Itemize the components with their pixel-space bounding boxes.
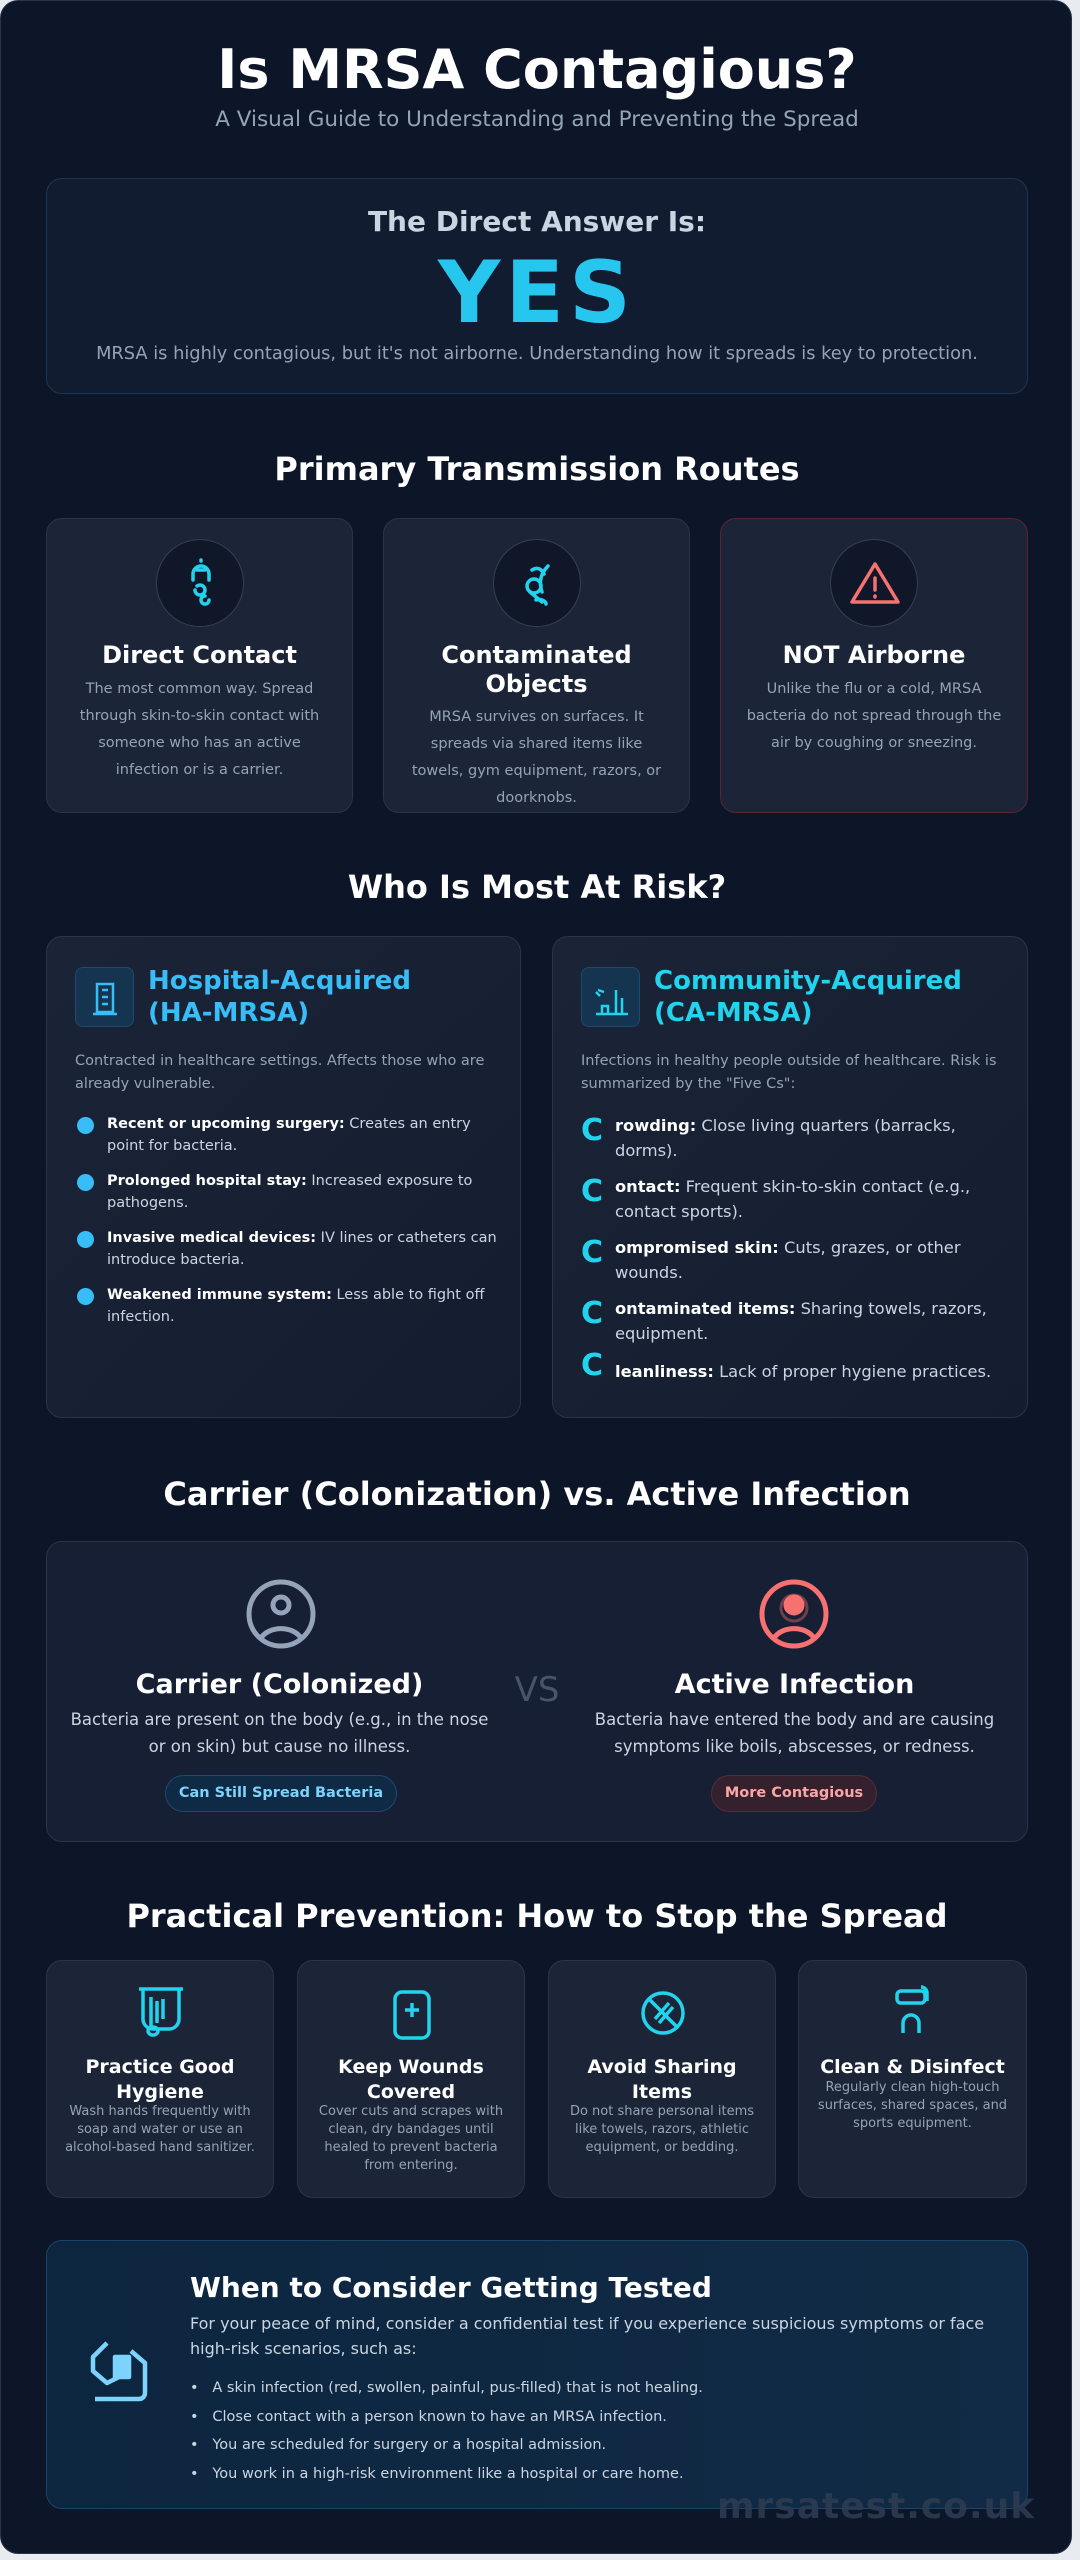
title: Covered bbox=[367, 2081, 455, 2103]
text: Cover cuts and scrapes with clean, dry bandages until healed to prevent bacteria from entering. bbox=[319, 2104, 503, 2173]
icon: contact bbox=[156, 539, 244, 627]
answer heading: The Direct Answer Is: bbox=[368, 205, 706, 238]
subtitle: A Visual Guide to Understanding and Preventing the Spread bbox=[215, 107, 859, 132]
heading: prevention: Practical Prevention: How to Stop the Spread bbox=[126, 1897, 948, 1935]
panel: community acquired bbox=[552, 936, 1028, 1418]
badge carrier bbox=[165, 1775, 397, 1812]
title bbox=[654, 966, 962, 1028]
five Cs list: C bbox=[581, 1113, 603, 1148]
panel: direct contact bbox=[46, 518, 353, 813]
heading: risk: Who Is Most At Risk? bbox=[348, 868, 726, 906]
panel: not airborne bbox=[720, 518, 1028, 813]
panel: wounds bbox=[297, 1960, 525, 2198]
title: Clean & Disinfect bbox=[820, 2056, 1005, 2078]
title: Hygiene bbox=[116, 2081, 204, 2103]
icon: warning bbox=[830, 539, 918, 627]
icon: objects bbox=[493, 539, 581, 627]
panel: getting tested bbox=[46, 2240, 1028, 2509]
panel: carrier vs infection bbox=[46, 1541, 1028, 1842]
icon: carrier bbox=[246, 1580, 316, 1648]
title: Direct Contact bbox=[102, 641, 297, 669]
title: Contaminated bbox=[441, 641, 632, 669]
title bbox=[587, 2056, 737, 2103]
five Cs list: C bbox=[581, 1296, 603, 1331]
panel: hospital acquired bbox=[46, 936, 521, 1418]
icon: no sharing bbox=[641, 1991, 685, 2035]
title infection: Active Infection bbox=[675, 1669, 914, 1700]
icon: hospital bbox=[75, 967, 134, 1027]
five Cs list bbox=[581, 1113, 991, 1383]
title bbox=[148, 966, 411, 1028]
title: NOT Airborne bbox=[783, 641, 965, 669]
risk list: Recent or upcoming surgery: Creates an entry point for bacteria. bbox=[107, 1116, 471, 1154]
bullet list: • You work in a high-risk environment like a hospital or care home. bbox=[190, 2466, 684, 2482]
text: Regularly clean high-touch surfaces, shared spaces, and sports equipment. bbox=[818, 2080, 1007, 2131]
bullet list: • You are scheduled for surgery or a hospital admission. bbox=[190, 2437, 606, 2453]
title: (HA-MRSA) bbox=[148, 998, 309, 1028]
title bbox=[338, 2056, 484, 2103]
badge infection bbox=[711, 1775, 877, 1812]
five Cs list: rowding: Close living quarters (barracks, dorms). bbox=[615, 1116, 956, 1160]
five Cs list: leanliness: Lack of proper hygiene practices. bbox=[615, 1362, 991, 1381]
panel: sharing bbox=[548, 1960, 776, 2198]
title: Keep Wounds bbox=[338, 2056, 484, 2078]
panel: direct answer bbox=[46, 178, 1028, 394]
watermark: mrsatest.co.uk bbox=[717, 2486, 1035, 2527]
text infection: Bacteria have entered the body and are causing symptoms like boils, abscesses, or redness. bbox=[595, 1710, 994, 1756]
risk list bbox=[77, 1116, 497, 1325]
risk list: Prolonged hospital stay: Increased exposure to pathogens. bbox=[107, 1173, 472, 1211]
icon: hand wash bbox=[139, 1987, 183, 2037]
panel: contaminated objects bbox=[383, 518, 690, 813]
text: The most common way. Spread through skin-to-skin contact with someone who has an active infection or is a carrier. bbox=[80, 681, 319, 778]
five Cs list: C bbox=[581, 1348, 603, 1383]
five Cs list: ontaminated items: Sharing towels, razors, equipment. bbox=[615, 1299, 987, 1343]
heading: transmission: Primary Transmission Routes bbox=[274, 450, 800, 488]
bullet list: • Close contact with a person known to have an MRSA infection. bbox=[190, 2409, 667, 2425]
text: Wash hands frequently with soap and water or use an alcohol-based hand sanitizer. bbox=[65, 2104, 255, 2155]
description: Infections in healthy people outside of healthcare. Risk is summarized by the "Five Cs": bbox=[581, 1053, 997, 1092]
title: Avoid Sharing bbox=[587, 2056, 737, 2078]
text: Unlike the flu or a cold, MRSA bacteria do not spread through the air by coughing or sneezing. bbox=[747, 681, 1001, 751]
icon: spray bbox=[895, 1985, 929, 2033]
icon: community bbox=[581, 967, 640, 1027]
icon: bandage bbox=[393, 1990, 431, 2040]
bullet list bbox=[190, 2380, 703, 2482]
heading: carrier vs infection: Carrier (Colonization) vs. Active Infection bbox=[163, 1475, 911, 1513]
icon: infection bbox=[760, 1580, 828, 1648]
answer text: MRSA is highly contagious, but it's not airborne. Understanding how it spreads is key to protection. bbox=[96, 343, 978, 364]
title: Items bbox=[632, 2081, 692, 2103]
title: (CA-MRSA) bbox=[654, 998, 813, 1028]
title bbox=[441, 641, 632, 698]
text carrier: Bacteria are present on the body (e.g., in the nose or on skin) but cause no illness. bbox=[71, 1710, 488, 1756]
panel: disinfect bbox=[798, 1960, 1027, 2198]
description: Contracted in healthcare settings. Affects those who are already vulnerable. bbox=[75, 1053, 484, 1092]
bullet list: • A skin infection (red, swollen, painful, pus-filled) that is not healing. bbox=[190, 2380, 703, 2396]
five Cs list: C bbox=[581, 1235, 603, 1270]
panel: hygiene bbox=[46, 1960, 274, 2198]
title: When to Consider Getting Tested bbox=[190, 2271, 712, 2304]
title bbox=[85, 2056, 235, 2103]
badge infection: More Contagious bbox=[725, 1785, 863, 1801]
risk list: Weakened immune system: Less able to fight off infection. bbox=[107, 1287, 484, 1325]
title: Practice Good bbox=[85, 2056, 235, 2078]
title carrier: Carrier (Colonized) bbox=[136, 1669, 423, 1700]
title: Objects bbox=[485, 670, 588, 698]
five Cs list: ompromised skin: Cuts, grazes, or other wounds. bbox=[615, 1238, 961, 1282]
title: Is MRSA Contagious? bbox=[217, 38, 857, 101]
badge carrier: Can Still Spread Bacteria bbox=[179, 1785, 383, 1801]
icon: test kit bbox=[90, 2341, 148, 2402]
five Cs list: ontact: Frequent skin-to-skin contact (e.g., contact sports). bbox=[615, 1177, 970, 1221]
title: Community-Acquired bbox=[654, 966, 962, 996]
text: MRSA survives on surfaces. It spreads via shared items like towels, gym equipment, razors, or doorknobs. bbox=[412, 709, 661, 806]
YES: YES bbox=[438, 243, 636, 343]
text: Do not share personal items like towels, razors, athletic equipment, or bedding. bbox=[570, 2104, 754, 2155]
five Cs list: C bbox=[581, 1174, 603, 1209]
VS: VS bbox=[515, 1670, 559, 1710]
intro: For your peace of mind, consider a confidential test if you experience suspicious symptoms or face high-risk scenarios, such as: bbox=[190, 2314, 984, 2358]
title: Hospital-Acquired bbox=[148, 966, 411, 996]
risk list: Invasive medical devices: IV lines or catheters can introduce bacteria. bbox=[107, 1230, 497, 1268]
